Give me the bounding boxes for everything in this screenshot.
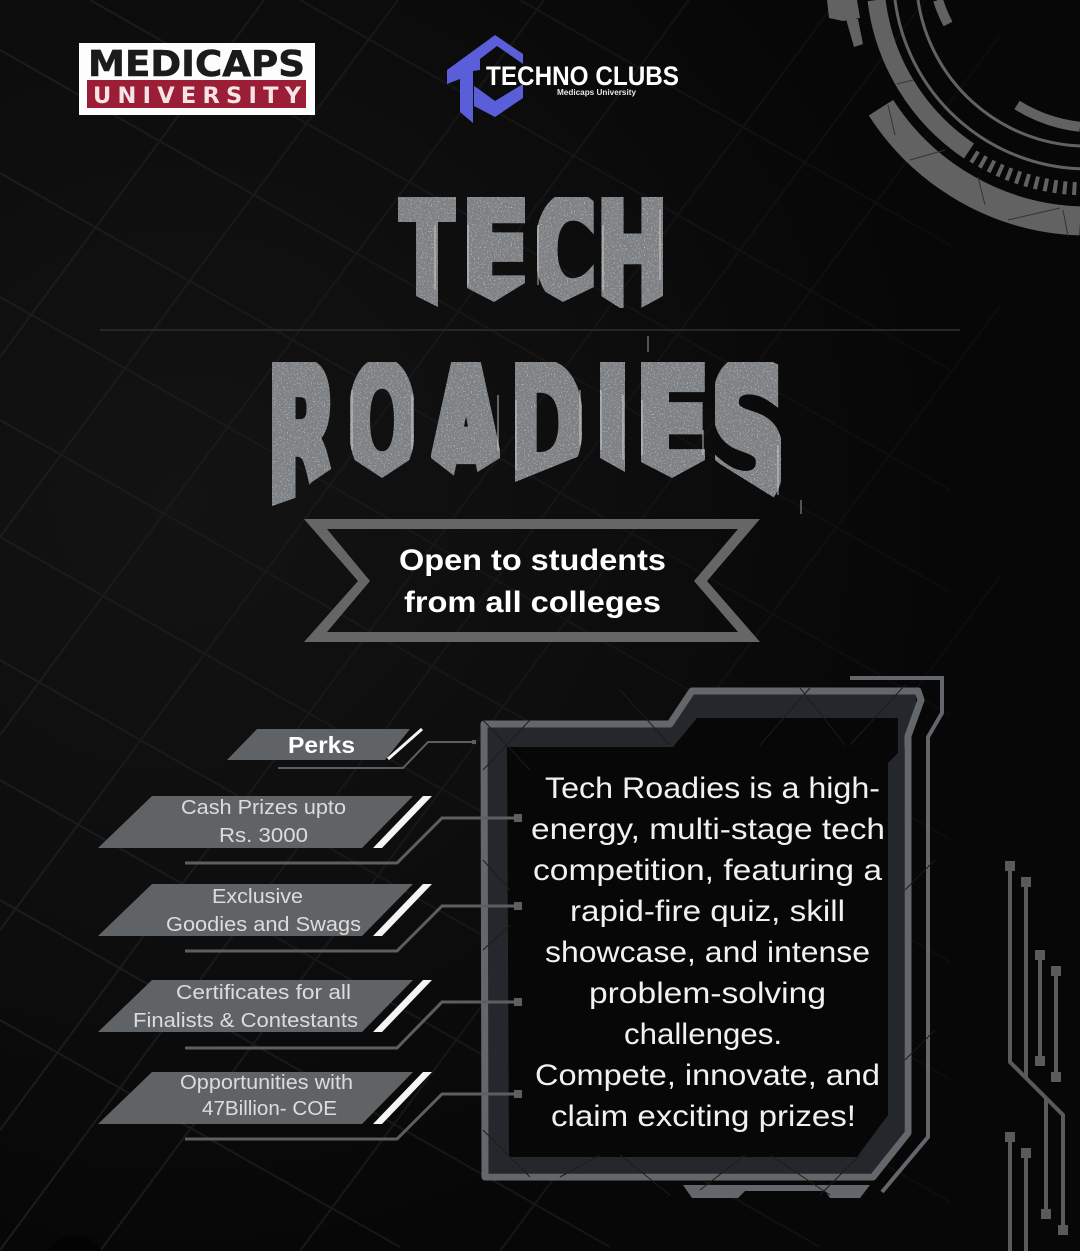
title: letters: T bbox=[398, 172, 456, 340]
title: letters: R bbox=[267, 328, 337, 546]
frame: outer accent line bbox=[850, 678, 942, 1192]
title: letters: E bbox=[634, 336, 710, 512]
description text: challenges. bbox=[624, 1018, 782, 1051]
decoration: circuit traces bbox=[1005, 861, 1068, 1251]
frame: bottom tabs bbox=[683, 1185, 870, 1198]
logo: Techno Clubs: Medicaps University bbox=[557, 88, 637, 97]
title: letters: A bbox=[431, 333, 501, 513]
logo: Medicaps University: MEDICAPS bbox=[88, 44, 305, 85]
title: letters: C bbox=[534, 172, 596, 334]
perk: goodies bbox=[98, 884, 522, 951]
description text bbox=[531, 772, 885, 1133]
perk: certificates: Finalists & Contestants bbox=[133, 1010, 358, 1032]
description text: rapid-fire quiz, skill bbox=[570, 895, 845, 928]
title: letters: O bbox=[347, 335, 417, 511]
title: letters: I bbox=[594, 335, 631, 507]
perk: cash prizes: Cash Prizes upto bbox=[181, 797, 346, 819]
frame: inner band bbox=[487, 694, 916, 1173]
title: letters bbox=[272, 197, 781, 506]
logo: Medicaps University: UNIVERSITY bbox=[93, 83, 302, 109]
logo: Techno Clubs: TECHNO CLUBS bbox=[486, 61, 679, 91]
banner: open to students bbox=[304, 519, 760, 642]
perk: heading: Perks bbox=[288, 732, 355, 758]
description text: Compete, innovate, and bbox=[535, 1059, 880, 1092]
title: letters: E bbox=[460, 170, 530, 333]
perk: opportunities: Opportunities with bbox=[180, 1072, 353, 1094]
frame: thin crosshatch bbox=[483, 685, 935, 1195]
title: glints bbox=[352, 210, 778, 495]
description text: energy, multi-stage tech bbox=[531, 813, 885, 846]
title: letters: D bbox=[507, 334, 585, 518]
perk: opportunities: 47Billion- COE bbox=[202, 1098, 337, 1120]
decoration: top-right HUD rings bbox=[827, 0, 1080, 236]
description text: claim exciting prizes! bbox=[551, 1100, 856, 1133]
description text: problem-solving bbox=[589, 977, 826, 1010]
title: letters: S bbox=[708, 329, 788, 544]
description text: competition, featuring a bbox=[533, 854, 882, 887]
perk: certificates: Certificates for all bbox=[176, 982, 351, 1004]
description text: showcase, and intense bbox=[545, 936, 870, 969]
perk: goodies: Goodies and Swags bbox=[166, 914, 361, 936]
perk: goodies: Exclusive bbox=[212, 886, 303, 908]
panel: description frame bbox=[483, 678, 942, 1198]
frame: inner panel bbox=[507, 718, 898, 1157]
perk: heading bbox=[227, 729, 476, 768]
title: letters: H bbox=[597, 170, 668, 339]
decoration: bottom-left dark circle bbox=[48, 1235, 102, 1251]
banner: open to students: from all colleges bbox=[404, 586, 661, 619]
perk: cash prizes bbox=[98, 796, 522, 863]
title bbox=[272, 197, 781, 506]
logo: Medicaps University bbox=[79, 43, 315, 115]
perk: cash prizes: Rs. 3000 bbox=[219, 825, 308, 847]
logo: Techno Clubs bbox=[447, 35, 679, 123]
perk: certificates bbox=[98, 980, 522, 1048]
perk: opportunities bbox=[98, 1072, 522, 1139]
banner: open to students: Open to students bbox=[399, 544, 666, 577]
description text: Tech Roadies is a high- bbox=[545, 772, 880, 805]
frame: outer stroke bbox=[484, 691, 921, 1177]
